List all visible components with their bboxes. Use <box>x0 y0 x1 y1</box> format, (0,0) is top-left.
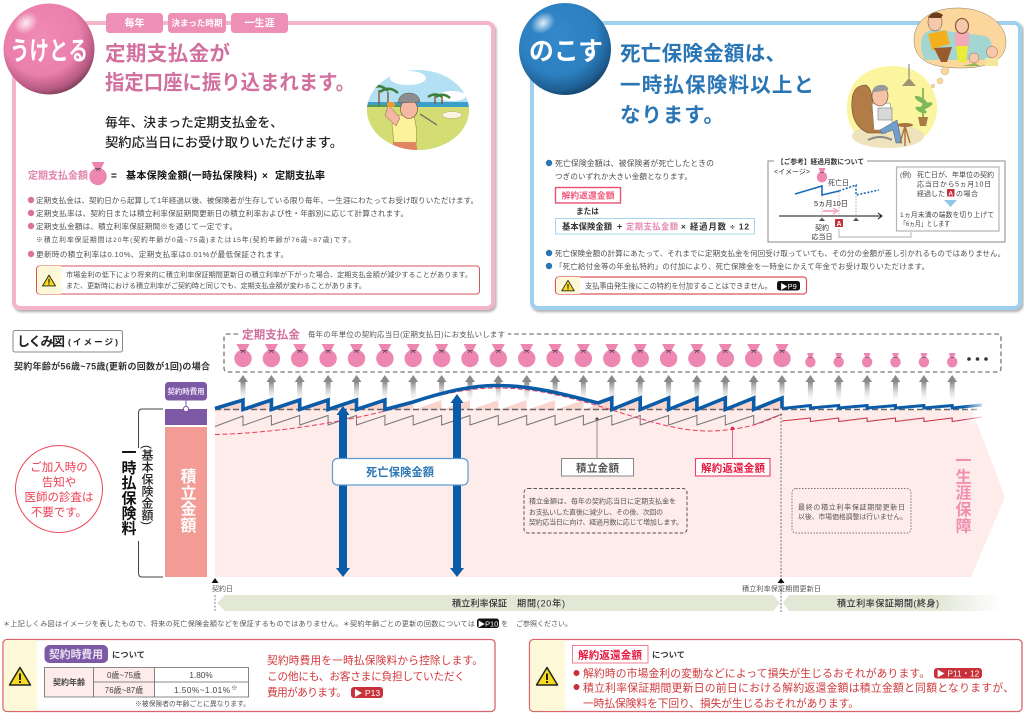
note: 積立金額: お支払いした直後に減少し、その後、次回の <box>529 508 663 516</box>
reference box: 経過月数: 1ヵ月未満の端数を切り上げて <box>900 210 994 219</box>
note: market value <box>792 488 911 533</box>
icon: warning <box>10 668 30 685</box>
baseline dashed <box>215 408 980 410</box>
heading: 死亡保険金額は、 <box>620 42 786 66</box>
salmon block: 積立金額: 積立金額 <box>178 468 196 534</box>
text: 費用説明: この他にも、お客さまに負担していただく <box>267 670 465 683</box>
payment box: 毎年の年単位の契約応当日(定期支払日)にお支払いします <box>308 330 505 339</box>
callout circle: 医師の診査は <box>24 490 94 504</box>
vertical renewal line <box>780 414 782 612</box>
list: risks: 一時払保険料を下回り、損失が生じるおそれがあります。 <box>583 696 859 710</box>
illustration: golfer <box>367 70 469 150</box>
formula: 定期支払金額 <box>28 169 88 182</box>
fill under sawtooth <box>215 399 782 410</box>
formula: 定期支払率 <box>275 169 325 182</box>
blue arrows: 死亡保険金額 <box>336 394 464 577</box>
panel frame <box>532 23 1020 308</box>
lead text: 毎年、決まった定期支払金を、 <box>105 115 283 130</box>
reference box: 経過月数 <box>768 156 1005 242</box>
section title: しくみ図: 契約年齢が56歳~75歳(更新の回数が1回)の場合 <box>14 360 210 372</box>
formula: 解約返還金額 or 基本保険金額: 解約返還金額 <box>562 190 615 200</box>
reference box: 経過月数: の場合 <box>956 189 978 198</box>
panel frame <box>14 23 493 308</box>
footnote: ▶P10 <box>478 620 498 628</box>
vertical label: 一時払保険料: 一時払保険料 <box>120 444 136 536</box>
section title: しくみ図 <box>13 330 210 372</box>
vertical label: 一生涯保障: 一生涯保障 <box>952 452 972 534</box>
table: fees: ※ <box>231 685 238 692</box>
formula: 解約返還金額 or 基本保険金額: + <box>617 222 622 232</box>
table: fees: 0歳~75歳 <box>107 670 141 680</box>
period bar: 20 years <box>217 595 780 611</box>
tabs: 一生涯 <box>244 16 274 30</box>
footnote: ご参照ください。 <box>516 619 572 628</box>
salmon block: 積立金額 <box>165 427 207 577</box>
formula: 解約返還金額 or 基本保険金額: または <box>576 206 599 216</box>
label: 死亡保険金額: 死亡保険金額 <box>366 465 435 479</box>
bullet notes: 「死亡給付金等の年金払特約」の付加により、死亡保険金を一時金にかえて年金でお受け取りいただけます。 <box>555 262 929 271</box>
formula <box>28 162 325 185</box>
reference box: 経過月数: 経過した <box>917 189 945 198</box>
reference box: 経過月数: 死亡日が、年単位の契約 <box>917 170 994 179</box>
grey sawtooth: 積立金額 <box>215 414 782 426</box>
heading: 一時払保険料以上と <box>620 74 814 97</box>
heading: なります。 <box>620 104 724 127</box>
callout circle <box>16 446 102 532</box>
section title: しくみ図: (イメージ) <box>68 337 118 347</box>
footnote: ＊上記しくみ図はイメージを表したもので、将来の死亡保険金額などを保証するものではありません。＊契約年齢ごとの更新の回数については <box>3 619 475 628</box>
sphere badge: うけとる <box>4 4 94 94</box>
label: 解約返還金額 <box>696 427 770 476</box>
footnote: を <box>501 620 508 628</box>
list: risks: 積立利率保証期間更新日の前日における解約返還金額は積立金額と同額となりますが、 <box>583 680 1014 694</box>
reference box: 経過月数: 死亡日 <box>828 178 849 187</box>
lower sawtooth after renewal <box>782 417 982 422</box>
table: fees: 76歳~87歳 <box>105 685 143 695</box>
label: 契約時費用: 契約時費用 <box>168 387 204 396</box>
label: 積立金額: 積立金額 <box>576 462 620 474</box>
callout: warning <box>556 277 806 294</box>
vertical label: 基本保険金額: (基本保険金額) <box>140 445 154 525</box>
formula: 解約返還金額 or 基本保険金額: × 経過月数 ÷ 12 <box>681 222 749 232</box>
panel: 解約返還金額について <box>530 640 1022 712</box>
label: 死亡保険金額 <box>332 458 468 485</box>
tabs <box>106 13 288 33</box>
table: fees: 1.80% <box>189 671 213 680</box>
bracket <box>138 409 163 577</box>
callout circle: ご加入時の <box>30 460 88 474</box>
panel: 契約時費用について: について <box>112 650 145 660</box>
note: market value: 最終の積立利率保証期間更新日 <box>798 502 905 512</box>
timeline: 積立利率保証期間更新日 <box>742 584 821 593</box>
sphere badge: のこす: のこす <box>529 38 603 66</box>
lead text: 契約応当日にお受け取りいただけます。 <box>105 135 343 150</box>
explanation text <box>546 158 714 181</box>
callout: warning: また、更新時における積立利率がご契約時と同じでも、定期支払金額が変わることがあります。 <box>66 281 366 290</box>
payment box: 定期支払金 <box>242 328 300 342</box>
bullet list: 定期支払金額は、積立利率保証期間※を通じて一定です。 <box>36 221 237 231</box>
reference box: 経過月数: 応当日 <box>812 232 832 241</box>
table: fees <box>44 668 248 697</box>
callout: warning: 市場金利の低下により将来的に積立利率保証期間更新日の積立利率が下がった場合、定期支払金額が減少することがあります。 <box>66 270 472 279</box>
reference box: 経過月数: 5ヵ月10日 <box>814 199 848 208</box>
timeline: 契約日 <box>212 584 233 593</box>
badge: 解約返還金額 <box>572 646 648 663</box>
text: 費用説明 <box>267 654 483 699</box>
heading: 指定口座に振り込まれます。 <box>105 72 355 94</box>
period bar: 20 years: 積立利率保証 <box>452 598 507 608</box>
reference box: 経過月数: 契約 <box>815 223 829 232</box>
callout: warning: ▶P9 <box>780 282 797 291</box>
table: fees: 1.50%~1.01% <box>174 686 230 695</box>
bullet list <box>28 195 478 259</box>
panel: のこす <box>519 3 1020 308</box>
reference box: 経過月数: 応当日から5ヵ月10日 <box>917 180 991 188</box>
blue sawtooth: 死亡保険金額 <box>215 386 782 410</box>
panel: 契約時費用について <box>3 640 495 712</box>
explanation text: つぎのいずれか大きい金額となります。 <box>555 171 692 181</box>
bullet list: 定期支払率は、契約日または積立利率保証期間更新日の積立利率および性・年齢別に応じて計算されます。 <box>36 208 408 218</box>
bullet list: ※積立利率保証期間は20年(契約年齢が0歳~75歳)または15年(契約年齢が76歳~87歳)です。 <box>36 235 355 244</box>
label: 契約時費用 <box>165 382 207 406</box>
payment box <box>224 328 1001 372</box>
period bar: lifetime: 積立利率保証期間(終身) <box>837 598 939 608</box>
sphere badge: のこす <box>519 3 611 95</box>
reference box: 経過月数: 「6ヵ月」とします <box>900 220 950 228</box>
text: 費用説明: 契約時費用を一時払保険料から控除します。 <box>267 654 483 667</box>
note: market value: 以後、市場価格調整は行いません。 <box>798 512 907 521</box>
callout: warning: 支払事由発生後にこの特約を付加することはできません。 <box>585 282 772 290</box>
panel: 解約返還金額について: について <box>652 650 685 660</box>
panel: 契約時費用について: ※被保険者の年齢ごとに異なります。 <box>135 699 250 708</box>
list: risks: ▶ P11・12 <box>937 668 980 678</box>
text: 費用説明: 費用があります。 <box>267 686 347 699</box>
label: 積立金額 <box>562 417 634 476</box>
formula: = <box>111 171 117 182</box>
formula: 解約返還金額 or 基本保険金額 <box>556 188 754 234</box>
badge: 契約時費用 <box>44 645 108 663</box>
footnote <box>3 618 572 628</box>
reference box: 経過月数: 【ご参考】経過月数について <box>777 157 864 166</box>
formula: 基本保険金額(一時払保険料) <box>126 169 257 182</box>
callout circle: 不要です。 <box>31 506 87 519</box>
period bar: 20 years: 期間(20年) <box>517 598 565 608</box>
note: 積立金額: 積立金額は、毎年の契約応当日に定期支払金を <box>529 496 676 506</box>
badge: 契約時費用: 契約時費用 <box>49 647 103 661</box>
explanation text: 死亡保険金額は、被保険者が死亡したときの <box>555 158 714 168</box>
bullet list: 更新時の積立利率は0.10%、定期支払率は0.01%が最低保証されます。 <box>36 249 288 259</box>
lead text <box>105 115 343 150</box>
reference box: 経過月数: A <box>948 190 953 198</box>
table: fees: 契約年齢 <box>53 677 85 687</box>
callout: warning <box>36 266 480 294</box>
formula: × <box>262 171 268 182</box>
icon: money bag small <box>817 168 827 182</box>
red dashed curve: 解約返還金額 <box>215 388 782 434</box>
timeline <box>212 578 1002 612</box>
bullet notes <box>546 249 1005 271</box>
bullet list: 定期支払金は、契約日から起算して1年経過以後、被保険者が生存している限り毎年、一生涯にわたってお受け取りいただけます。 <box>36 195 478 205</box>
payment arrows <box>238 375 957 402</box>
left stack bar <box>120 382 207 577</box>
sphere badge: うけとる: うけとる <box>10 36 88 66</box>
label: 解約返還金額: 解約返還金額 <box>701 462 766 474</box>
period bar: lifetime <box>783 595 1002 611</box>
heading <box>105 42 355 94</box>
heading <box>620 42 814 127</box>
heading: 定期支払金が <box>105 42 230 66</box>
tabs: 決まった時期 <box>171 17 223 28</box>
callout circle: 告知や <box>42 475 76 489</box>
reference box: 経過月数: (例) <box>900 170 911 179</box>
chart: mechanism diagram <box>215 328 1005 612</box>
list: risks: 解約時の市場金利の変動などによって損失が生じるおそれがあります。 <box>583 666 930 680</box>
reference box: 経過月数: A <box>836 221 842 228</box>
reference box: 経過月数: <イメージ> <box>774 169 810 176</box>
icon: warning <box>536 668 558 685</box>
formula: 解約返還金額 or 基本保険金額: 基本保険金額 <box>562 222 613 232</box>
list: risks <box>574 666 1014 710</box>
note: 積立金額: 契約応当日に向け、経過月数に応じて増加します。 <box>529 518 683 526</box>
tabs: 毎年 <box>124 16 144 30</box>
chart background arrow <box>215 410 1005 577</box>
bullet notes: 死亡保険金額の計算にあたって、それまでに定期支払金を何回受け取っていても、その分の金額が差し引かれるものではありません。 <box>555 249 1005 258</box>
note: 積立金額 <box>524 488 687 533</box>
badge: 解約返還金額: 解約返還金額 <box>578 648 642 661</box>
section title: しくみ図: しくみ図 <box>17 334 65 349</box>
money bags <box>234 344 988 367</box>
panel: うけとる <box>4 4 493 308</box>
icon: money bag <box>89 162 107 185</box>
illustration: man in chair dreaming of family <box>847 8 1006 148</box>
text: 費用説明: ▶ P13 <box>354 688 380 698</box>
formula: 解約返還金額 or 基本保険金額: 定期支払金額 <box>626 222 679 232</box>
